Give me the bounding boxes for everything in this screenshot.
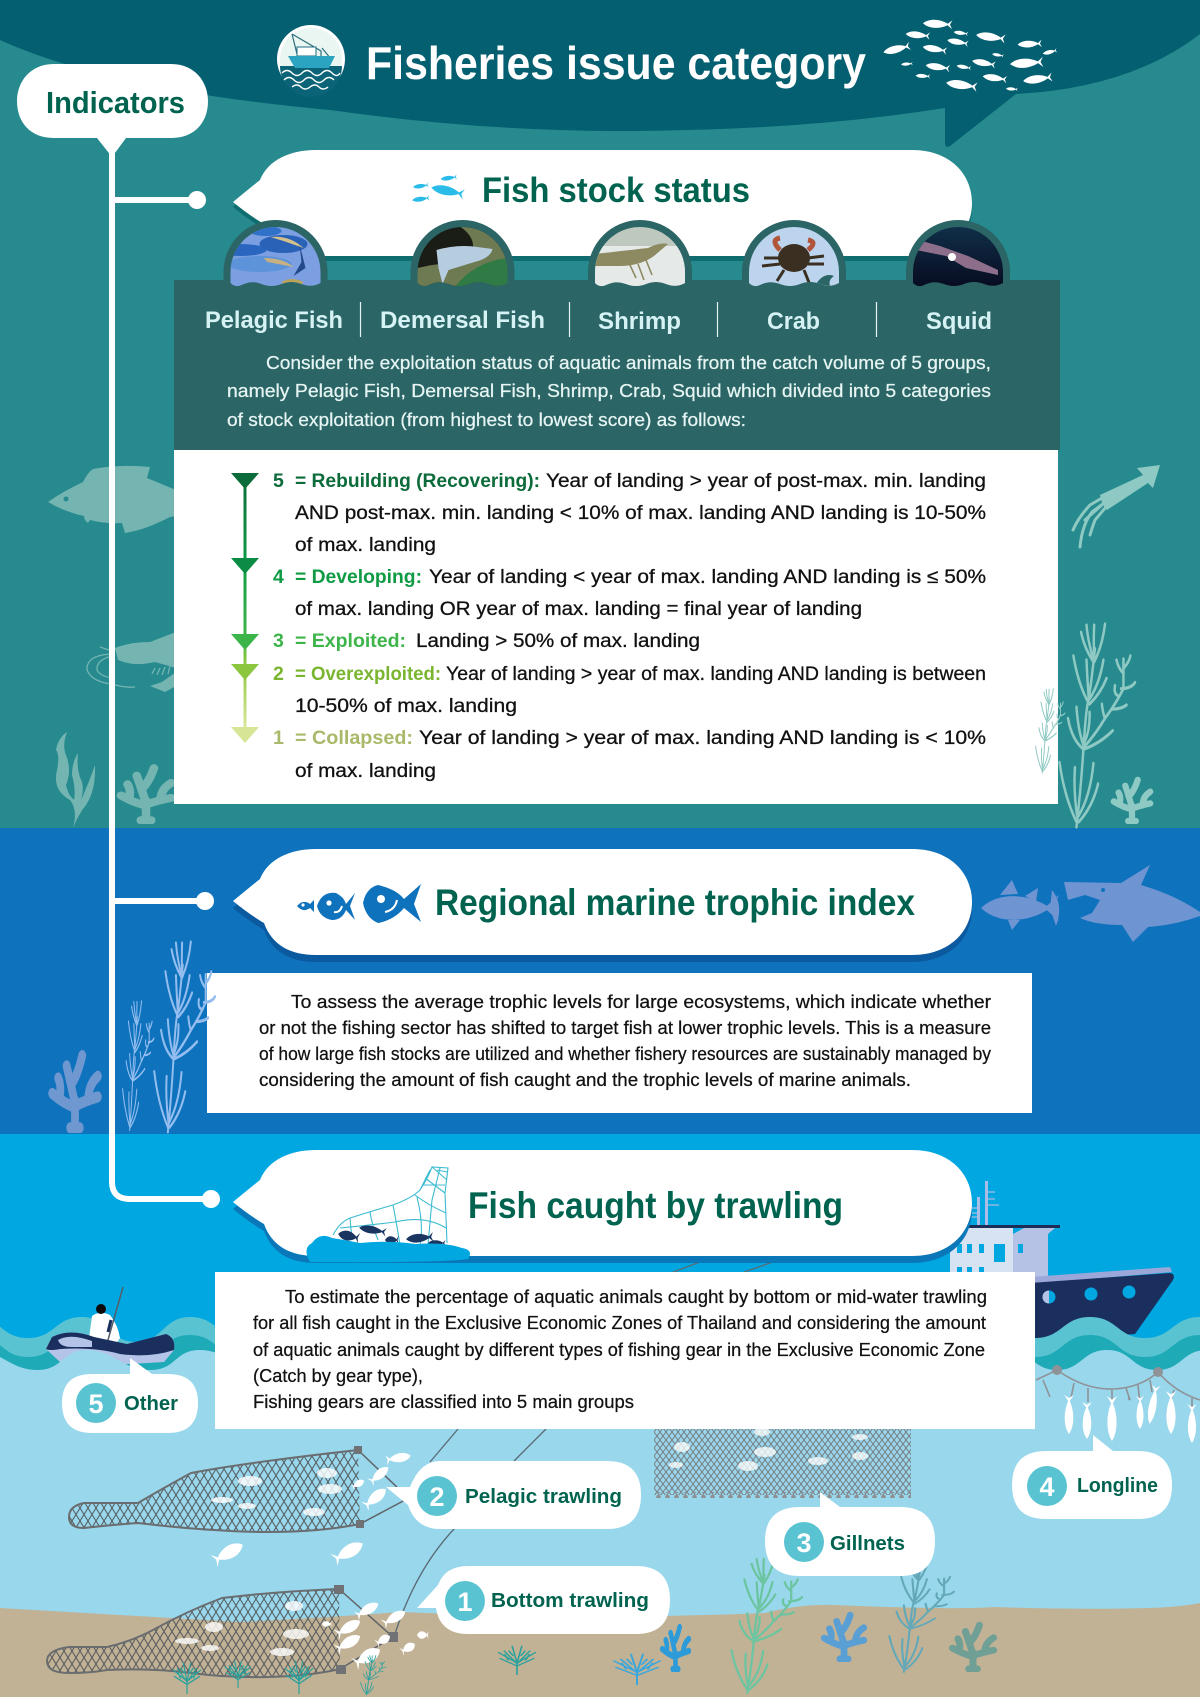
category 1: of max. landing bbox=[295, 760, 436, 782]
arch: squid photo bbox=[906, 220, 1010, 290]
indicators callout: Indicators bbox=[46, 85, 185, 120]
callout: 4 longline: 4 bbox=[1039, 1472, 1055, 1502]
callout: 3 gillnets: Gillnets bbox=[830, 1533, 905, 1555]
net fish bbox=[322, 1599, 429, 1670]
callout: 2 pelagic trawling: Pelagic trawling bbox=[465, 1486, 622, 1508]
category 5 bbox=[273, 470, 986, 556]
category 1: = Collapsed: bbox=[295, 727, 413, 749]
arch: pelagic fish photo bbox=[224, 220, 328, 286]
arch: demersal fish photo bbox=[410, 220, 514, 290]
group labels bbox=[205, 302, 992, 337]
tow lines bbox=[394, 1262, 773, 1637]
callout: 4 longline: Longline bbox=[1077, 1475, 1158, 1497]
header banner with speech tail bbox=[0, 0, 1200, 147]
category 3: 3 bbox=[273, 630, 284, 652]
pelagic trawl net bbox=[69, 1446, 412, 1567]
callout: 1 bottom trawling: 1 bbox=[457, 1587, 473, 1617]
group labels: Demersal Fish bbox=[380, 307, 545, 334]
category 4: of max. landing OR year of max. landing = final year of landing bbox=[295, 598, 862, 620]
background silhouette: shark bbox=[1064, 865, 1200, 942]
fishing ship bbox=[950, 1181, 1174, 1340]
category 1: Year of landing > year of max. landing AND landing is < 10% bbox=[419, 727, 986, 749]
category 4 bbox=[273, 566, 986, 620]
intro text: of stock exploitation (from highest to lowest score) as follows: bbox=[227, 409, 746, 430]
background silhouette: tuna bbox=[981, 880, 1059, 930]
category 2: = Overexploited: bbox=[295, 663, 441, 685]
panel: trophic index description: To assess the average trophic levels for large ecosystems, which indicate whether bbox=[291, 991, 991, 1012]
background silhouette: kelp left bbox=[56, 732, 95, 828]
group labels: Squid bbox=[926, 308, 992, 335]
trawl fish bbox=[210, 1451, 412, 1567]
callout: 5 other bbox=[62, 1358, 198, 1433]
group labels: Pelagic Fish bbox=[205, 307, 343, 334]
category 4: = Developing: bbox=[295, 566, 422, 588]
arch: crab photo bbox=[742, 220, 846, 290]
gillnet bbox=[654, 1428, 911, 1498]
bottom trawl net bbox=[47, 1585, 429, 1677]
indicators spine line bbox=[112, 150, 211, 1199]
panel: fish stock header bbox=[174, 280, 1060, 450]
intro text bbox=[227, 352, 991, 430]
panel: trophic index description: considering the amount of fish caught and the trophic levels of marine animals. bbox=[259, 1069, 911, 1090]
arrow scale bbox=[231, 473, 259, 743]
category 2: 10-50% of max. landing bbox=[295, 695, 517, 717]
group labels: Crab bbox=[767, 308, 820, 335]
background silhouette: blue coral bbox=[52, 1056, 98, 1128]
category 3: Landing > 50% of max. landing bbox=[416, 630, 700, 652]
category 4: Year of landing < year of max. landing AND landing is ≤ 50% bbox=[429, 566, 986, 588]
seabed bbox=[0, 1603, 1200, 1697]
callout: 2 pelagic trawling bbox=[386, 1461, 641, 1529]
category 1 bbox=[273, 727, 986, 782]
icon: trawl net with catch bbox=[306, 1167, 470, 1262]
bubble: fish caught by trawling: Fish caught by trawling bbox=[468, 1185, 843, 1226]
panel: exploitation categories bbox=[174, 450, 1058, 804]
arch: shrimp photo bbox=[588, 220, 692, 291]
callout: 2 pelagic trawling: 2 bbox=[429, 1482, 445, 1512]
sea waves bbox=[0, 1317, 1200, 1420]
category 4: 4 bbox=[273, 566, 284, 588]
panel: trawling description: To estimate the percentage of aquatic animals caught by bottom or mid-water trawling bbox=[285, 1286, 987, 1307]
panel: trawling description bbox=[215, 1272, 1035, 1429]
bubble: fish caught by trawling bbox=[233, 1150, 972, 1263]
callout: 3 gillnets: 3 bbox=[796, 1528, 812, 1558]
callout: 3 gillnets bbox=[765, 1492, 935, 1576]
icon: school of fish bbox=[882, 19, 1057, 92]
intro text: namely Pelagic Fish, Demersal Fish, Shrimp, Crab, Squid which divided into 5 categories bbox=[227, 380, 991, 401]
pale lower water bbox=[0, 1350, 1200, 1697]
fisherman in boat bbox=[46, 1287, 174, 1364]
callout: 4 longline bbox=[1012, 1435, 1172, 1519]
bubble: fish stock status bbox=[233, 150, 972, 261]
callout: 1 bottom trawling: Bottom trawling bbox=[491, 1590, 649, 1612]
panel: trophic index description: of how large fish stocks are utilized and whether fishery resources are sustainably managed by bbox=[259, 1043, 992, 1064]
intro text: Consider the exploitation status of aquatic animals from the catch volume of 5 groups, bbox=[266, 352, 991, 373]
seabed plants and corals bbox=[173, 1558, 994, 1695]
background silhouette: seaweed right bbox=[1036, 624, 1135, 827]
callout: 5 other: 5 bbox=[88, 1389, 104, 1419]
background silhouette: squid bbox=[1073, 465, 1160, 547]
group labels: Shrimp bbox=[598, 308, 681, 335]
category 5: Year of landing > year of post-max. min. landing bbox=[546, 470, 986, 492]
category 2 bbox=[273, 663, 986, 717]
bubble: regional marine trophic index: Regional marine trophic index bbox=[435, 882, 915, 923]
bubble: regional marine trophic index bbox=[233, 849, 972, 962]
panel: trophic index description bbox=[207, 973, 1032, 1113]
panel: trawling description: (Catch by gear type), bbox=[253, 1365, 423, 1386]
category 2: Year of landing > year of max. landing AND landing is between bbox=[446, 663, 986, 685]
category 5: = Rebuilding (Recovering): bbox=[295, 470, 540, 492]
background silhouette: shrimp bbox=[87, 632, 176, 692]
callout: 5 other: Other bbox=[124, 1393, 178, 1415]
icon: small blue fishes bbox=[412, 174, 465, 203]
background silhouette: fish bbox=[48, 466, 176, 533]
background silhouette: coral left bbox=[121, 768, 171, 820]
indicators callout bbox=[17, 64, 208, 157]
icon: fishing boat badge bbox=[277, 25, 345, 97]
panel: trawling description: Fishing gears are classified into 5 main groups bbox=[253, 1391, 634, 1412]
longline gear bbox=[1036, 1365, 1200, 1443]
background silhouette: small coral right bbox=[1114, 780, 1150, 821]
icon: trophic level fishes bbox=[297, 884, 421, 923]
category 5: 5 bbox=[273, 470, 284, 492]
category 3: = Exploited: bbox=[295, 630, 406, 652]
category 1: 1 bbox=[273, 727, 284, 749]
category 5: AND post-max. min. landing < 10% of max. landing AND landing is 10-50% bbox=[295, 502, 986, 524]
panel: trawling description: of aquatic animals caught by different types of fishing gear in the Exclusive Economic Zone bbox=[253, 1339, 985, 1360]
category 2: 2 bbox=[273, 663, 284, 685]
category 3 bbox=[273, 630, 700, 652]
spine node dots bbox=[188, 191, 220, 1208]
callout: 1 bottom trawling bbox=[417, 1566, 670, 1634]
panel: trophic index description: or not the fishing sector has shifted to target fish at lower trophic levels. This is a measure bbox=[259, 1017, 991, 1038]
bubble: fish stock status: Fish stock status bbox=[482, 171, 750, 210]
title: Fisheries issue category bbox=[366, 37, 866, 89]
panel: trawling description: for all fish caught in the Exclusive Economic Zones of Thailand and considering the amount bbox=[253, 1312, 986, 1333]
category 5: of max. landing bbox=[295, 534, 436, 556]
background silhouette: blue seaweed bbox=[123, 942, 215, 1132]
